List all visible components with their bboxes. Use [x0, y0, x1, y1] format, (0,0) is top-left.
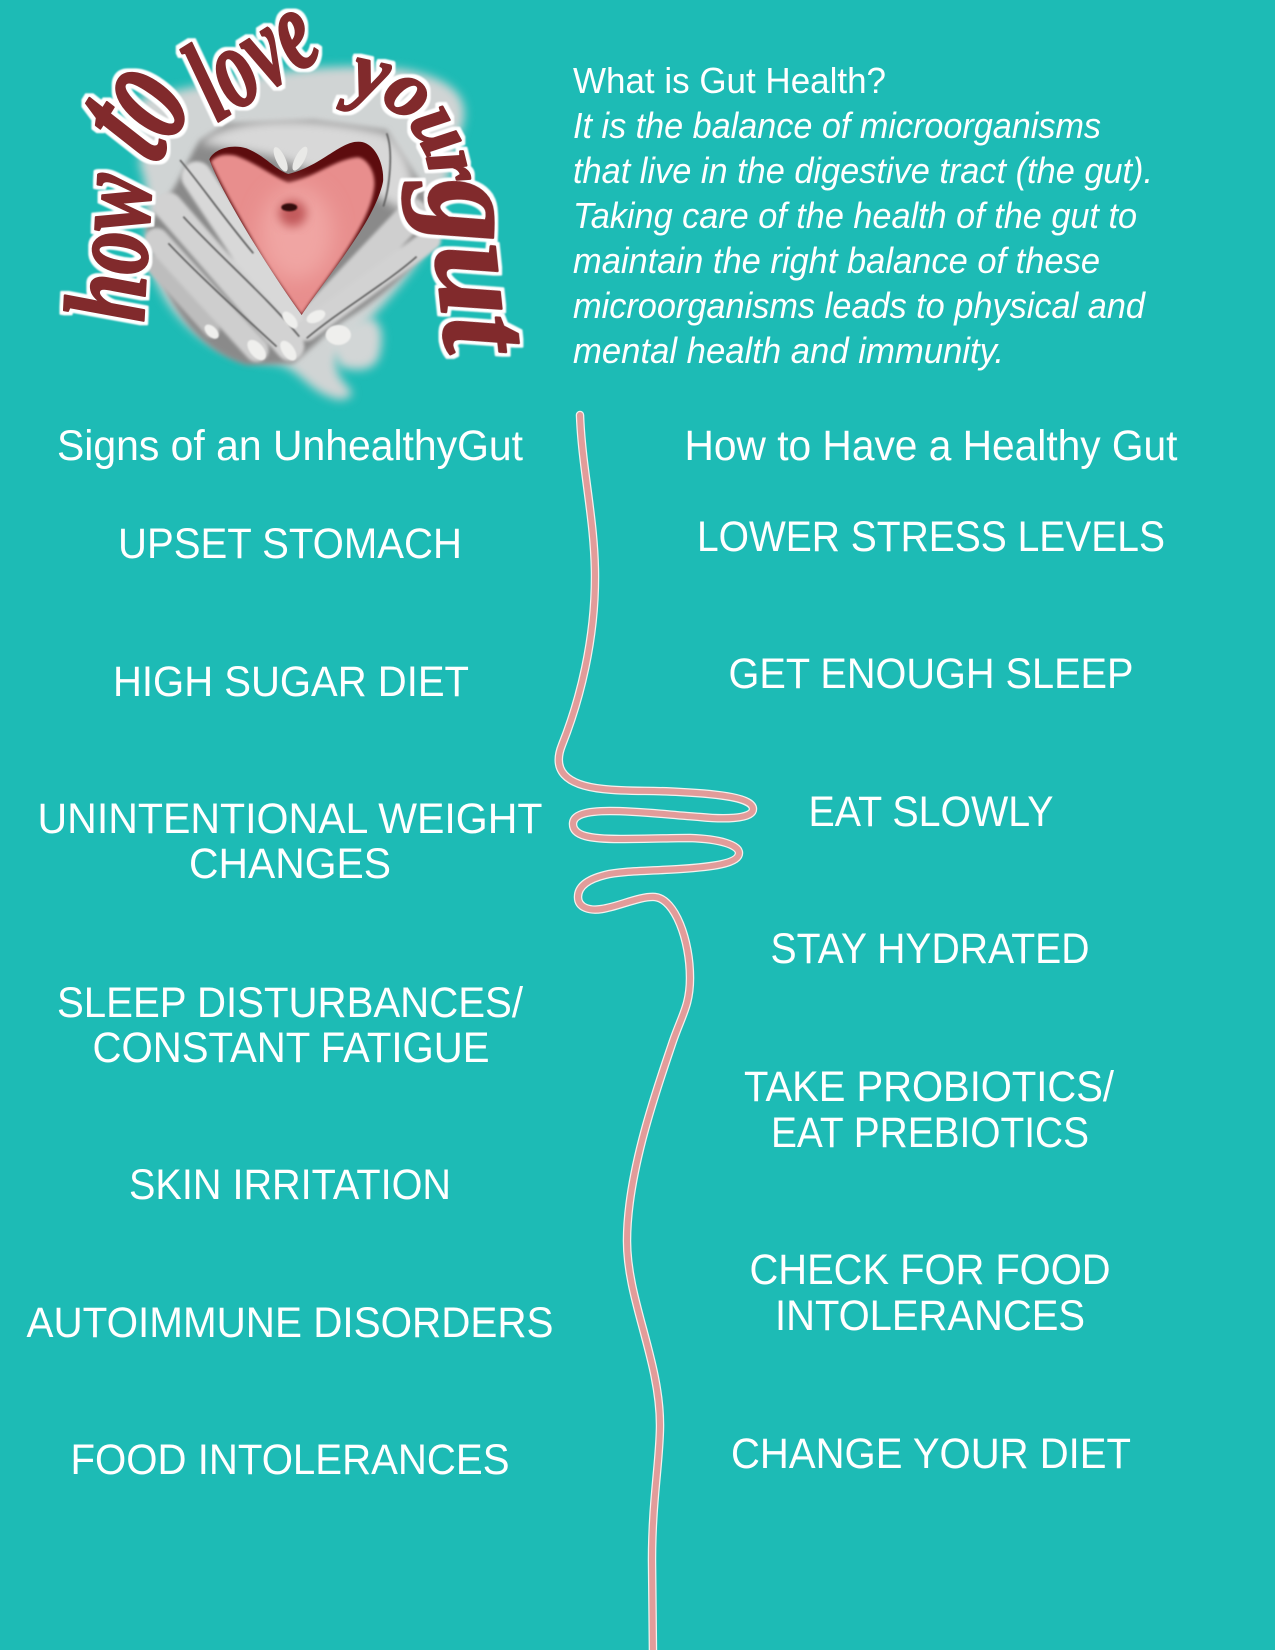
title word: to: to [33, 26, 226, 186]
tip: change your diet: CHANGE YOUR DIET [731, 1430, 1131, 1478]
intro body: microorganisms leads to physical and [573, 285, 1146, 326]
sign: upset stomach: UPSET STOMACH [118, 520, 462, 568]
panel: how to have a healthy gut [684, 422, 1178, 1478]
sign: high sugar diet: HIGH SUGAR DIET [113, 658, 469, 706]
tip: probiotics and prebiotics: EAT PREBIOTICS [771, 1109, 1089, 1157]
title word: your: your [332, 52, 476, 182]
tip: check for food intolerances: CHECK FOR FOOD [750, 1246, 1110, 1294]
sign: unintentional weight changes: CHANGES [189, 840, 391, 888]
sign: unintentional weight changes [38, 795, 542, 888]
tip: probiotics and prebiotics: TAKE PROBIOTICS/ [744, 1063, 1114, 1111]
tip: lower stress levels: LOWER STRESS LEVELS [697, 513, 1165, 561]
intro body: It is the balance of microorganisms [573, 105, 1101, 146]
heart-shaped belly window [209, 142, 384, 315]
fingers [152, 177, 430, 350]
intro body [573, 105, 1153, 371]
gut line divider [559, 415, 753, 1650]
title illustration: hands forming heart with curved title [33, 0, 561, 407]
title word: how: how [41, 170, 176, 324]
sign: skin irritation: SKIN IRRITATION [129, 1161, 451, 1209]
tip: eat slowly: EAT SLOWLY [808, 788, 1054, 836]
tip: stay hydrated: STAY HYDRATED [770, 925, 1090, 973]
photo: hands background [140, 67, 464, 400]
curved title: how to love your gut [33, 0, 561, 362]
sign: sleep disturbances: CONSTANT FATIGUE [92, 1024, 490, 1072]
intro body: mental health and immunity. [573, 330, 1004, 371]
tip: check for food intolerances [750, 1246, 1110, 1340]
intro text block [573, 60, 1153, 371]
left heading: Signs of an UnhealthyGut [57, 422, 523, 470]
intro heading: What is Gut Health? [573, 60, 886, 101]
sign: sleep disturbances [57, 979, 523, 1072]
tip: get enough sleep: GET ENOUGH SLEEP [728, 650, 1134, 698]
finger separators [168, 133, 417, 347]
navel [279, 200, 307, 227]
sign: sleep disturbances: SLEEP DISTURBANCES/ [57, 979, 523, 1027]
fingertips at heart top [271, 145, 310, 173]
title word: gut: gut [399, 168, 561, 362]
sign: food intolerances: FOOD INTOLERANCES [70, 1436, 510, 1484]
intro body: that live in the digestive tract (the gut). [573, 150, 1153, 191]
right heading: How to Have a Healthy Gut [684, 422, 1178, 470]
intro body: Taking care of the health of the gut to [573, 195, 1137, 236]
sign: autoimmune disorders: AUTOIMMUNE DISORDERS [26, 1299, 554, 1347]
intro body: maintain the right balance of these [573, 240, 1100, 281]
tip: check for food intolerances: INTOLERANCES [775, 1292, 1085, 1340]
tip: probiotics and prebiotics [744, 1063, 1114, 1157]
panel: signs of an unhealthy gut [26, 422, 554, 1484]
fingernails [202, 307, 351, 363]
sign: unintentional weight changes: UNINTENTIONAL WEIGHT [38, 795, 542, 843]
